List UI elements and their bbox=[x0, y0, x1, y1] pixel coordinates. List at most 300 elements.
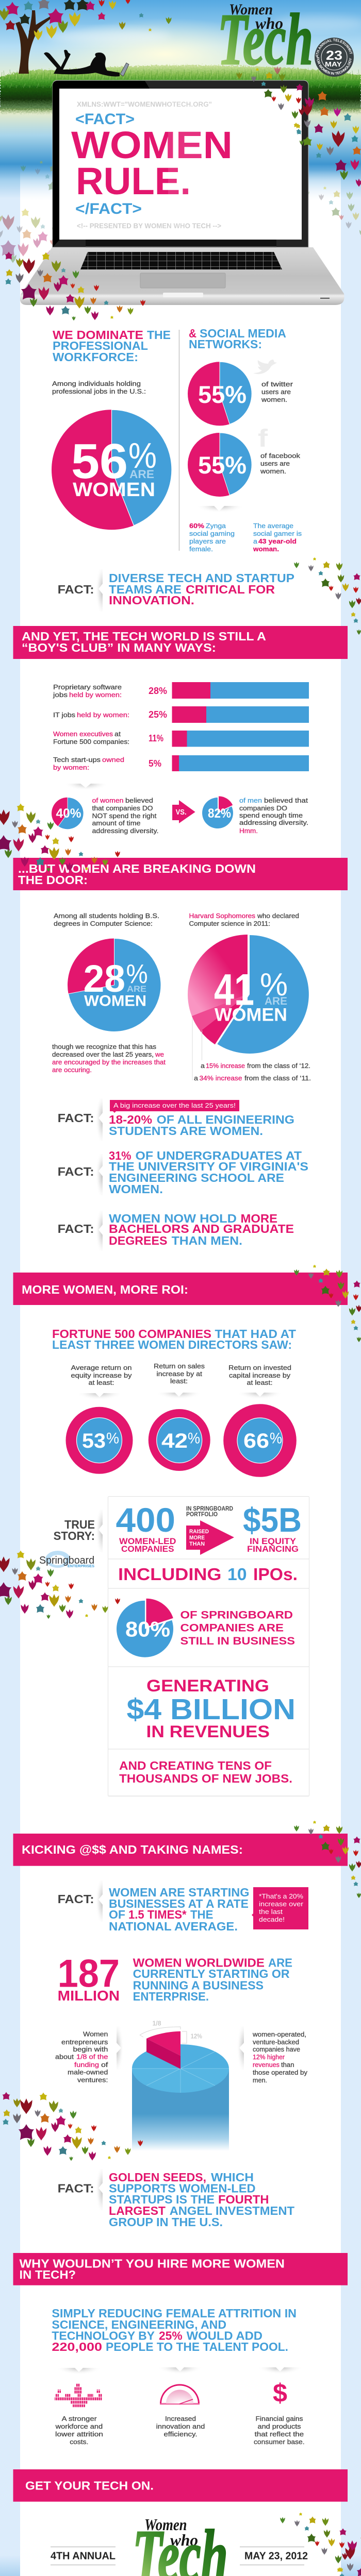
icon: dollar: $ bbox=[273, 2379, 287, 2408]
fact: starting businesses: 1.5 TIMES* bbox=[128, 1908, 187, 1921]
heading: we dominate the professional workforce: PROFESSIONAL bbox=[53, 339, 148, 352]
heading: social media networks: & bbox=[189, 327, 196, 340]
text: class increases: 15% increase bbox=[206, 1062, 245, 1070]
flowers: section 1 right bbox=[294, 557, 361, 635]
fact: university of virginia: ENGINEERING SCHOOL ARE bbox=[109, 1171, 284, 1184]
benefit: financial gains: consumer base. bbox=[254, 2438, 305, 2446]
text: class increases: a bbox=[201, 1062, 205, 1070]
pie chart: 56% are women bbox=[52, 410, 172, 530]
column: return on invested capital: 66 bbox=[243, 1430, 269, 1452]
text: men believed: companies DO bbox=[239, 804, 287, 812]
arrow: raised more than: MORE bbox=[189, 1535, 205, 1541]
pie chart: 56% are women: 56 bbox=[71, 434, 128, 489]
stat: including 10 IPOs: IPOs. bbox=[253, 1565, 298, 1584]
text: B.S. degrees: Among all students holding B.S. bbox=[54, 912, 159, 920]
faded flower reflections bbox=[0, 161, 361, 277]
text: women believed: believed bbox=[125, 796, 153, 804]
fact: golden seeds: GOLDEN SEEDS, bbox=[109, 2171, 206, 2184]
benefit: increased innovation: efficiency. bbox=[164, 2430, 197, 2438]
flowers: footer right bbox=[280, 2513, 361, 2576]
benefit: financial gains: Financial gains bbox=[256, 2415, 303, 2422]
text: entrepreneurs funding: funding bbox=[74, 2061, 99, 2069]
fact: diverse teams: FACT: bbox=[58, 583, 94, 596]
bar: proprietary software 28%: Proprietary software bbox=[53, 683, 122, 691]
heading: reducing attrition: TECHNOLOGY BY bbox=[52, 2329, 155, 2343]
banner: boy's club bbox=[13, 626, 348, 659]
text: average social gamer: social gamer is bbox=[253, 530, 302, 537]
text: women worldwide: WOMEN WORLDWIDE bbox=[133, 1956, 265, 1970]
bar: women executives 11%: Fortune 500 companies: bbox=[53, 738, 129, 745]
flowers: section 6 left bbox=[2, 2092, 143, 2161]
text: twitter users: women. bbox=[261, 396, 287, 403]
arrow: vs. bbox=[172, 800, 195, 823]
fact: golden seeds: SUPPORTS WOMEN-LED bbox=[109, 2182, 256, 2195]
fact: diverse teams: CRITICAL FOR bbox=[186, 583, 275, 596]
text: Harvard sophomores: Harvard Sophomores bbox=[189, 912, 256, 920]
text: still in business: COMPANIES ARE bbox=[180, 1622, 284, 1634]
text: class increases: a bbox=[194, 1074, 199, 1082]
text: new jobs bbox=[119, 1759, 292, 1785]
screen text: WOMEN bbox=[71, 124, 233, 166]
fact: more degrees than men: DEGREES bbox=[109, 1234, 167, 1247]
flowers: header right cluster bbox=[237, 66, 361, 187]
benefit: stronger workforce: lower attrition bbox=[55, 2430, 103, 2438]
text: women believed bbox=[92, 796, 159, 835]
raised pink slice bbox=[146, 2039, 180, 2069]
text: entrepreneurs funding: of bbox=[101, 2061, 108, 2069]
bar: tech start-ups 5%: 5% bbox=[149, 758, 161, 769]
fact: university of virginia: WOMEN. bbox=[109, 1182, 163, 1196]
logo: Springboard Enterprises: ENTERPRISES bbox=[68, 1565, 94, 1568]
callout: 20% increase bbox=[252, 1887, 308, 1929]
label: 12% bbox=[182, 2031, 202, 2043]
column: return on equity: % bbox=[106, 1430, 119, 1447]
heading: social media networks bbox=[189, 327, 286, 351]
fact: diverse teams: DIVERSE TECH AND STARTUP bbox=[109, 571, 294, 585]
fact: university of virginia bbox=[58, 1149, 308, 1196]
text: still in business: OF SPRINGBOARD bbox=[180, 1609, 293, 1621]
text: average social gamer bbox=[253, 522, 302, 553]
callout shadow bbox=[66, 784, 106, 796]
fact: golden seeds: FOURTH bbox=[218, 2193, 269, 2206]
benefit: financial gains bbox=[254, 2367, 305, 2446]
label: 12%: 12% bbox=[191, 2032, 202, 2040]
pie chart: 28% are women bbox=[68, 939, 161, 1031]
text: among individuals bbox=[52, 380, 146, 395]
pie chart: 40% of women bbox=[52, 798, 84, 829]
pie chart: 82% of men bbox=[202, 796, 233, 828]
text: entrepreneurs funding: 1/8 of the bbox=[76, 2053, 108, 2061]
text: women believed: amount of time bbox=[92, 819, 140, 827]
callout: 20% increase: the last bbox=[259, 1908, 283, 1916]
bar: IT jobs 25%: held by women: bbox=[77, 711, 129, 719]
laptop screen bezel bbox=[53, 80, 308, 247]
fact: starting businesses: THE bbox=[190, 1908, 213, 1921]
heading: social media networks: NETWORKS: bbox=[189, 337, 262, 351]
text: zynga players: social gaming bbox=[189, 530, 235, 537]
header sky scene bbox=[0, 0, 361, 198]
banner: more women, more ROI bbox=[13, 1273, 348, 1305]
text: higher revenues: revenues bbox=[253, 2061, 280, 2069]
banner: why wouldn't you hire: IN TECH? bbox=[20, 2268, 76, 2281]
logo: Women Who Tech bbox=[218, 0, 313, 80]
footer sky scene bbox=[0, 2555, 361, 2576]
text: women worldwide: ENTERPRISE. bbox=[133, 1990, 209, 2003]
text: class increases: from the class of ‘11. bbox=[244, 1074, 311, 1082]
divider bbox=[178, 330, 179, 551]
stat: generating $4 billion: IN REVENUES bbox=[146, 1722, 270, 1741]
bar: IT jobs 25%: IT jobs bbox=[53, 711, 76, 719]
text: higher revenues: men. bbox=[253, 2076, 267, 2084]
flowers: section 4 left bbox=[0, 1550, 120, 1619]
shadow notch left bbox=[117, 2026, 128, 2070]
fact: more degrees than men: THAN MEN. bbox=[172, 1234, 242, 1247]
bar: tech start-ups 5%: by women: bbox=[53, 764, 89, 771]
heading: fortune 500 companies: FORTUNE 500 COMPANIES bbox=[52, 1327, 211, 1341]
pie top bbox=[132, 2044, 229, 2093]
fact: diverse teams: INNOVATION. bbox=[109, 594, 194, 607]
bar: proprietary software 28%: held by women: bbox=[69, 691, 122, 699]
benefit: financial gains: that reflect the bbox=[255, 2430, 304, 2438]
stat: including 10 IPOs: 10 bbox=[227, 1565, 247, 1584]
logo: Springboard Enterprises bbox=[39, 1551, 94, 1568]
text: entrepreneurs funding: male-owned bbox=[68, 2069, 108, 2076]
text: still in business bbox=[180, 1609, 295, 1647]
pie chart: twitter 55%: 55% bbox=[198, 381, 247, 408]
fact: golden seeds: ANGEL INVESTMENT bbox=[170, 2204, 294, 2217]
text: 4th annual: 4TH ANNUAL bbox=[51, 2551, 116, 2562]
bar: tech start-ups 5%: Tech start-ups bbox=[53, 756, 101, 764]
text: women believed: NOT spend the right bbox=[92, 812, 157, 820]
stat: 400 women-led companies: 400 bbox=[116, 1501, 175, 1539]
banner: breaking down the door: ...BUT WOMEN ARE BREAKING DOWN bbox=[18, 862, 256, 875]
heading: reducing attrition: PEOPLE TO THE TALENT POOL. bbox=[106, 2340, 288, 2353]
pie chart: 56% are women: % bbox=[128, 435, 157, 476]
text: new jobs: THOUSANDS OF NEW JOBS. bbox=[119, 1772, 292, 1785]
text: though we recognize: we bbox=[155, 1050, 164, 1058]
screen text bbox=[71, 100, 233, 230]
pie chart: facebook 55%: 55% bbox=[198, 451, 247, 479]
icon: twitter bird bbox=[253, 360, 277, 374]
text: higher revenues: companies have bbox=[253, 2045, 300, 2053]
panel frame bbox=[108, 1496, 309, 1796]
heading: social media networks: SOCIAL MEDIA bbox=[200, 327, 286, 340]
label: 1/8 bbox=[140, 2020, 180, 2037]
callout: 20% increase: *That's a 20% bbox=[259, 1892, 303, 1900]
fact: engineering students: OF ALL ENGINEERING bbox=[157, 1113, 294, 1126]
text: women believed: that companies DO bbox=[92, 804, 153, 812]
banner: kicking @$$: KICKING @$$ AND TAKING NAMES: bbox=[22, 1843, 243, 1856]
fact: diverse teams: TEAMS ARE bbox=[109, 583, 182, 596]
column: return on sales bbox=[149, 1362, 210, 1471]
banner: more women, more ROI: MORE WOMEN, MORE ROI: bbox=[22, 1283, 188, 1296]
text: B.S. degrees: degrees in Computer Science: bbox=[54, 920, 153, 927]
text: class increases: 34% increase bbox=[199, 1074, 242, 1082]
banner: why wouldn't you hire: WHY WOULDN’T YOU HIRE MORE WOMEN bbox=[20, 2257, 285, 2270]
column: return on sales: least: bbox=[170, 1377, 188, 1385]
text: though we recognize: though we recognize that this has bbox=[52, 1043, 157, 1050]
true story label bbox=[54, 1510, 103, 1552]
pie chart: 28% are women: 28 bbox=[84, 957, 125, 1000]
benefit: financial gains: and products bbox=[258, 2422, 301, 2430]
arrow: raised more than: THAN bbox=[189, 1541, 205, 1547]
column: return on invested capital: % bbox=[270, 1430, 282, 1447]
springboard panel bbox=[108, 1496, 309, 1796]
text: Harvard sophomores bbox=[189, 912, 299, 927]
banner: get your tech on bbox=[13, 2469, 348, 2502]
text: entrepreneurs funding: Women bbox=[83, 2030, 108, 2038]
badge: 23 May: 23 bbox=[326, 48, 342, 63]
text: men believed: Hmm. bbox=[239, 827, 258, 835]
text: average social gamer: The average bbox=[253, 522, 293, 530]
callout shadow bbox=[198, 506, 242, 518]
column: return on sales: increase by at bbox=[157, 1370, 202, 1378]
laptop screen bbox=[59, 89, 302, 240]
badge: 23 May: MAY bbox=[325, 60, 342, 68]
screen text: XMLNS:WWT="WOMENWHOTECH.ORG" bbox=[77, 100, 212, 108]
fact: starting businesses: WOMEN ARE STARTING bbox=[109, 1886, 250, 1899]
logo: Women Who Tech: Women bbox=[229, 1, 273, 18]
column: return on equity: equity increase by bbox=[71, 1371, 132, 1379]
column: return on invested capital: Return on invested bbox=[228, 1364, 291, 1371]
column: return on equity: Average return on bbox=[71, 1364, 132, 1371]
pie chart: 28% are women: WOMEN bbox=[84, 993, 146, 1010]
arrow: raised more than bbox=[186, 1505, 234, 1555]
callout: big increase: A big increase over the last 25 years! bbox=[113, 1101, 236, 1109]
text: zynga players bbox=[189, 522, 235, 553]
column: return on sales: 42 bbox=[161, 1430, 188, 1452]
text: May 23, 2012: MAY 23, 2012 bbox=[244, 2551, 308, 2562]
screen text: </FACT> bbox=[75, 200, 142, 217]
badge: 23 May: 4TH ANNUAL TELESUMMIT bbox=[316, 39, 353, 57]
text: higher revenues: venture-backed bbox=[253, 2038, 299, 2046]
laptop bbox=[20, 80, 344, 305]
fact: more degrees than men: MORE bbox=[240, 1212, 277, 1225]
laptop base bbox=[20, 247, 344, 305]
bar: proprietary software 28%: jobs bbox=[53, 691, 68, 699]
logo: Women Who Tech telesummit: Women bbox=[144, 2515, 187, 2534]
badge: 23 May: FOR WOMEN IN TECHNOLOGY bbox=[317, 57, 352, 75]
stat: $5B in equity financing: $5B bbox=[243, 1501, 302, 1539]
bar chart: women in tech jobs bbox=[53, 682, 309, 771]
trackpad bbox=[140, 273, 225, 288]
text: twitter users: of twitter bbox=[261, 380, 293, 388]
text: class increases: from the class of ‘12. bbox=[247, 1062, 310, 1070]
pie chart: 56% are women: ARE bbox=[129, 468, 154, 481]
fact: golden seeds bbox=[58, 2169, 294, 2229]
bar: women executives 11% bbox=[53, 730, 309, 747]
pie chart: twitter 55% bbox=[188, 362, 252, 426]
pie chart: 40% of women: 40% bbox=[56, 806, 81, 821]
fact: engineering students bbox=[58, 1098, 294, 1141]
arrow: raised more than: IN SPRINGBOARD bbox=[186, 1505, 233, 1512]
bar: proprietary software 28% bbox=[53, 682, 309, 699]
flowers: laptop trail bbox=[5, 251, 145, 320]
text: higher revenues: women-operated, bbox=[252, 2030, 306, 2038]
text: though we recognize: decreased over the last 25 years, bbox=[52, 1050, 154, 1058]
fact: golden seeds: STARTUPS IS THE bbox=[109, 2193, 215, 2206]
stat: $5B in equity financing: IN EQUITY bbox=[250, 1537, 296, 1546]
banner: why wouldn't you hire bbox=[13, 2253, 348, 2285]
stat: $5B in equity financing bbox=[243, 1501, 302, 1554]
fact: starting businesses bbox=[58, 1880, 249, 1933]
text: men believed: believed that bbox=[264, 796, 308, 804]
text: average social gamer: a bbox=[253, 537, 258, 545]
fact: golden seeds: LARGEST bbox=[109, 2204, 166, 2217]
pie chart: 41% are women: WOMEN bbox=[215, 1005, 287, 1025]
fact: starting businesses: BUSINESSES AT A RATE bbox=[109, 1897, 249, 1910]
text: B.S. degrees bbox=[54, 912, 159, 927]
text: new jobs: AND CREATING TENS OF bbox=[119, 1759, 272, 1772]
icon: people bbox=[55, 2383, 102, 2408]
heading: reducing attrition: 220,000 bbox=[52, 2340, 102, 2353]
pie chart: 28% are women: % bbox=[126, 959, 148, 989]
text: men believed bbox=[239, 796, 308, 835]
fact: engineering students: 18-20% bbox=[109, 1113, 152, 1126]
bar: women executives 11%: 11% bbox=[149, 733, 163, 743]
benefit: increased innovation: Increased bbox=[165, 2415, 196, 2422]
text: women believed: addressing diversity. bbox=[92, 827, 159, 835]
logo: Women Who Tech: Tech bbox=[218, 0, 313, 80]
pie chart: 41% are women bbox=[188, 935, 309, 1054]
icon: facebook f: f bbox=[258, 425, 268, 452]
text: higher revenues: than bbox=[281, 2061, 294, 2069]
text: twitter users bbox=[261, 380, 293, 403]
heading: reducing attrition: WOULD ADD bbox=[187, 2329, 262, 2343]
pie chart: 41% are women: 41 bbox=[214, 965, 254, 1015]
text: women believed: of women bbox=[92, 796, 124, 804]
bar: women executives 11%: at bbox=[114, 730, 121, 738]
logo: Women Who Tech telesummit bbox=[133, 2515, 228, 2576]
fact: engineering students: FACT: bbox=[58, 1111, 94, 1125]
callout: big increase bbox=[110, 1100, 239, 1113]
fact: starting businesses: OF bbox=[109, 1908, 125, 1921]
fact: more degrees than men bbox=[58, 1211, 294, 1251]
column: return on invested capital: capital increase by bbox=[229, 1371, 291, 1379]
column: return on equity bbox=[66, 1364, 133, 1474]
benefit: increased innovation: innovation and bbox=[156, 2422, 205, 2430]
pie chart: facebook 55% bbox=[188, 433, 252, 497]
header grass island bbox=[0, 65, 361, 114]
banner: breaking down the door: THE DOOR: bbox=[18, 873, 88, 887]
fact: university of virginia: THE UNIVERSITY OF VIRGINIA'S bbox=[109, 1160, 308, 1173]
fact: university of virginia: OF UNDERGRADUATES AT bbox=[135, 1149, 302, 1162]
text: higher revenues: those operated by bbox=[253, 2069, 308, 2076]
column: return on invested capital: at least: bbox=[247, 1379, 272, 1386]
pie chart: 56% are women: WOMEN bbox=[73, 479, 155, 501]
pie chart: 41% are women: % bbox=[260, 967, 288, 1003]
tree bbox=[0, 0, 171, 74]
text: entrepreneurs funding: entrepreneurs bbox=[61, 2038, 108, 2046]
banner: get your tech on: GET YOUR TECH ON. bbox=[25, 2479, 154, 2493]
text: higher revenues: 12% higher bbox=[253, 2053, 285, 2061]
text: 4th annual bbox=[51, 2547, 116, 2565]
stat: 187 million: 187 bbox=[58, 1952, 120, 1996]
stat: including 10 IPOs: INCLUDING bbox=[118, 1565, 222, 1584]
banner: breaking down the door bbox=[13, 858, 348, 890]
fact: golden seeds: GROUP IN THE U.S. bbox=[109, 2215, 223, 2229]
arrow: raised more than: PORTFOLIO bbox=[186, 1511, 218, 1518]
benefit: stronger workforce: workforce and bbox=[55, 2422, 103, 2430]
text: entrepreneurs funding: about bbox=[55, 2053, 74, 2061]
fact: university of virginia: FACT: bbox=[58, 1165, 94, 1178]
fact: starting businesses: FACT: bbox=[58, 1892, 94, 1906]
text: May 23, 2012 bbox=[240, 2547, 308, 2565]
text: facebook users bbox=[260, 452, 301, 475]
stat: 400 women-led companies bbox=[116, 1501, 176, 1554]
flowers: section 3 right bbox=[294, 1265, 361, 1342]
stat: generating $4 billion bbox=[127, 1676, 296, 1741]
text: Harvard sophomores: who declared bbox=[257, 912, 299, 920]
bar: tech start-ups 5% bbox=[53, 755, 309, 771]
text: though we recognize: are occuring. bbox=[52, 1066, 92, 1074]
column: return on equity: 53 bbox=[82, 1430, 106, 1452]
text: Harvard sophomores: Computer science in 2011: bbox=[189, 920, 270, 927]
arrow: vs.: VS. bbox=[176, 808, 187, 817]
screen text: <!-- PRESENTED BY WOMEN WHO TECH --> bbox=[77, 222, 221, 230]
stat: 400 women-led companies: COMPANIES bbox=[121, 1545, 174, 1554]
flowers: section 2 left bbox=[0, 803, 120, 872]
text: facebook users: women. bbox=[260, 467, 286, 475]
banner: boy's club: “BOY'S CLUB” IN MANY WAYS: bbox=[22, 641, 216, 654]
stat: 187 million: MILLION bbox=[58, 1988, 120, 2004]
column: return on sales: % bbox=[188, 1430, 200, 1447]
badge: 23 May bbox=[315, 38, 354, 77]
heading: fortune 500 companies bbox=[52, 1327, 296, 1351]
benefit: stronger workforce: costs. bbox=[70, 2438, 88, 2446]
benefit: stronger workforce: A stronger bbox=[62, 2415, 97, 2422]
bar: proprietary software 28%: 28% bbox=[149, 686, 167, 696]
pie chart: 80% still in business: 80% bbox=[125, 1617, 170, 1641]
pie chart: 41% are women: ARE bbox=[265, 995, 287, 1007]
pie chart: 80% still in business bbox=[117, 1599, 173, 1657]
benefit: increased innovation bbox=[156, 2367, 205, 2438]
pie chart: 82% of men: 82% bbox=[208, 806, 231, 821]
stat: 400 women-led companies: WOMEN-LED bbox=[119, 1537, 176, 1546]
logo: Springboard Enterprises: Springboard bbox=[39, 1555, 94, 1566]
screen text: RULE. bbox=[76, 160, 191, 202]
heading: reducing attrition: SCIENCE, ENGINEERING, AND bbox=[52, 2318, 226, 2331]
keyboard bbox=[80, 252, 282, 269]
shadow notch right bbox=[233, 2026, 244, 2070]
fact: engineering students: STUDENTS ARE WOMEN. bbox=[109, 1124, 263, 1138]
logo: Women Who Tech telesummit: who bbox=[170, 2531, 198, 2549]
text: facebook users: of facebook bbox=[260, 452, 301, 460]
label: 1/8: 1/8 bbox=[153, 2020, 161, 2027]
text: among individuals: Among individuals holding bbox=[52, 380, 141, 387]
heading: we dominate the professional workforce bbox=[53, 328, 171, 364]
banner: boy's club: AND YET, THE TECH WORLD IS STILL A bbox=[22, 630, 266, 643]
heading: reducing attrition: SIMPLY REDUCING FEMALE ATTRITION IN bbox=[52, 2307, 297, 2320]
text: among individuals: professional jobs in the U.S.: bbox=[52, 387, 146, 395]
stat: generating $4 billion: GENERATING bbox=[146, 1676, 269, 1695]
text: entrepreneurs funding bbox=[55, 2030, 108, 2084]
text: higher revenues bbox=[252, 2030, 308, 2084]
text: men believed: of men bbox=[239, 796, 262, 804]
fact: more degrees than men: BACHELORS AND GRADUATE bbox=[109, 1222, 294, 1235]
text: twitter users: users are bbox=[261, 388, 291, 396]
callout: 20% increase: decade! bbox=[259, 1916, 285, 1923]
heading: fortune 500 companies: LEAST THREE WOMEN DIRECTORS SAW: bbox=[52, 1338, 292, 1351]
bar: women executives 11%: Women executives bbox=[53, 730, 113, 738]
callout: 20% increase: increase over bbox=[259, 1900, 304, 1908]
flowers: section 5 right bbox=[294, 1821, 361, 1898]
bar: tech start-ups 5%: owned bbox=[102, 756, 124, 764]
heading: fortune 500 companies: THAT HAD AT bbox=[215, 1327, 296, 1341]
text: entrepreneurs funding: ventures: bbox=[77, 2076, 108, 2084]
logo: Women Who Tech: who bbox=[255, 14, 283, 32]
text: women worldwide: ARE bbox=[268, 1956, 292, 1970]
